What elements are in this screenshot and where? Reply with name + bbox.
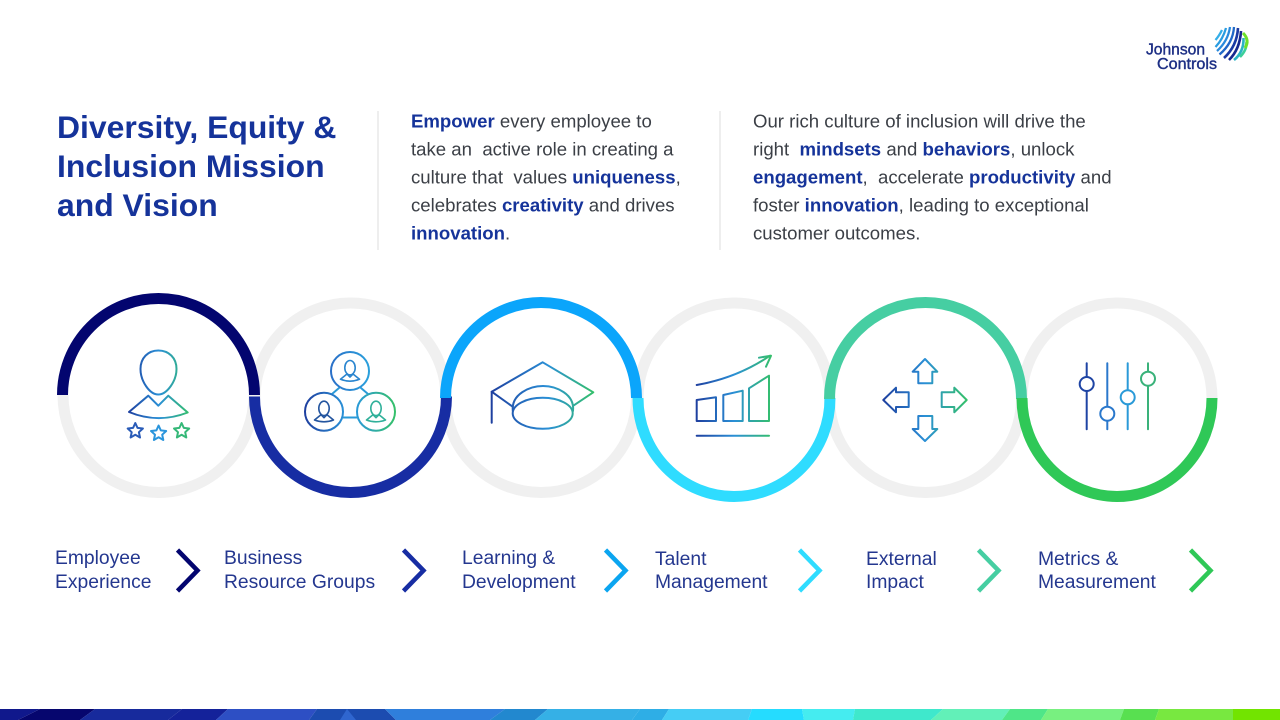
label: Employee Experience: Employee xyxy=(55,548,141,569)
label: External Impact xyxy=(866,549,937,593)
arrow 3 xyxy=(606,550,626,591)
star left xyxy=(128,423,143,438)
text block: vision: foster innovation, leading to exceptional xyxy=(753,194,1089,216)
text block: mission xyxy=(411,110,681,244)
ring chain xyxy=(62,298,1212,496)
logo swirl mark xyxy=(1216,27,1247,60)
title: Diversity, Equity & xyxy=(57,109,336,145)
label: Metrics & Measurement: Metrics & xyxy=(1038,549,1118,570)
title: Inclusion Mission xyxy=(57,148,325,184)
ring 4 grey half xyxy=(638,303,830,398)
title: and Vision xyxy=(57,187,218,223)
text block: vision: customer outcomes. xyxy=(753,222,920,244)
person left xyxy=(305,393,343,431)
label: Learning & Development: Learning & xyxy=(462,548,555,569)
ring 1 grey half xyxy=(63,395,254,493)
logo: Johnson Controls xyxy=(1146,27,1247,73)
ring 1 navy arc xyxy=(62,298,254,395)
divider right xyxy=(719,111,721,250)
label: Learning & Development: Development xyxy=(462,572,576,593)
logo wordmark: Controls xyxy=(1157,56,1217,73)
icon: four-way arrows xyxy=(883,359,967,441)
logo wordmark: Johnson xyxy=(1146,42,1205,58)
ring 4 cyan arc xyxy=(638,398,830,496)
label: External Impact: Impact xyxy=(866,572,925,593)
label: Business Resource Groups: Resource Groups xyxy=(224,572,375,593)
label: Talent Management: Talent xyxy=(655,549,707,570)
text block: mission: take an active role in creating a xyxy=(411,138,674,160)
connectors xyxy=(332,388,368,418)
text block: mission: celebrates creativity and drives xyxy=(411,194,675,216)
ring 2 grey half xyxy=(255,303,446,397)
label: Employee Experience: Experience xyxy=(55,572,151,593)
text block: vision: Our rich culture of inclusion will drive the xyxy=(753,110,1086,132)
ring 3 grey half xyxy=(446,398,636,492)
label: External Impact: External xyxy=(866,549,937,570)
ring 2 blue arc xyxy=(254,396,446,492)
label: Metrics & Measurement xyxy=(1038,549,1157,593)
arrow 6 xyxy=(1190,550,1210,591)
text block: mission: Empower every employee to xyxy=(411,110,652,132)
star right xyxy=(174,423,189,438)
text block: mission: innovation. xyxy=(411,222,510,244)
icon: three connected people xyxy=(305,352,395,431)
ring 6 green arc xyxy=(1022,398,1212,496)
icon: sliders xyxy=(1080,363,1155,429)
ring 5 teal arc xyxy=(830,302,1022,399)
arrow 4 xyxy=(800,550,820,591)
label: Business Resource Groups xyxy=(224,548,375,593)
label: Talent Management: Management xyxy=(655,572,768,593)
bottom gradient band xyxy=(0,709,1280,720)
icon: growth chart xyxy=(697,356,771,436)
label: Talent Management xyxy=(655,549,768,593)
person top xyxy=(331,352,369,390)
shoulders xyxy=(129,396,188,418)
text block: mission: culture that values uniqueness, xyxy=(411,166,681,188)
icon: graduation cap xyxy=(492,362,593,429)
title xyxy=(57,109,336,223)
label: Business Resource Groups: Business xyxy=(224,548,302,569)
logo wordmark xyxy=(1146,42,1217,73)
text block: vision xyxy=(753,110,1112,244)
star middle xyxy=(151,426,166,440)
label: Learning & Development xyxy=(462,548,576,593)
arrow 1 xyxy=(178,550,198,591)
label: Metrics & Measurement: Measurement xyxy=(1038,572,1157,593)
head xyxy=(140,350,176,394)
text block: vision: right mindsets and behaviors, unlock xyxy=(753,138,1075,160)
icon: person with stars xyxy=(128,350,189,440)
ring 5 grey half xyxy=(830,399,1022,492)
arrow 5 xyxy=(978,550,998,591)
divider left xyxy=(377,111,379,250)
arrow 2 xyxy=(404,550,424,591)
person right xyxy=(357,393,395,431)
ring 6 grey half xyxy=(1022,303,1212,398)
text block: vision: engagement, accelerate productivity and xyxy=(753,166,1112,188)
ring 3 sky arc xyxy=(446,302,636,398)
label: Employee Experience xyxy=(55,548,151,593)
